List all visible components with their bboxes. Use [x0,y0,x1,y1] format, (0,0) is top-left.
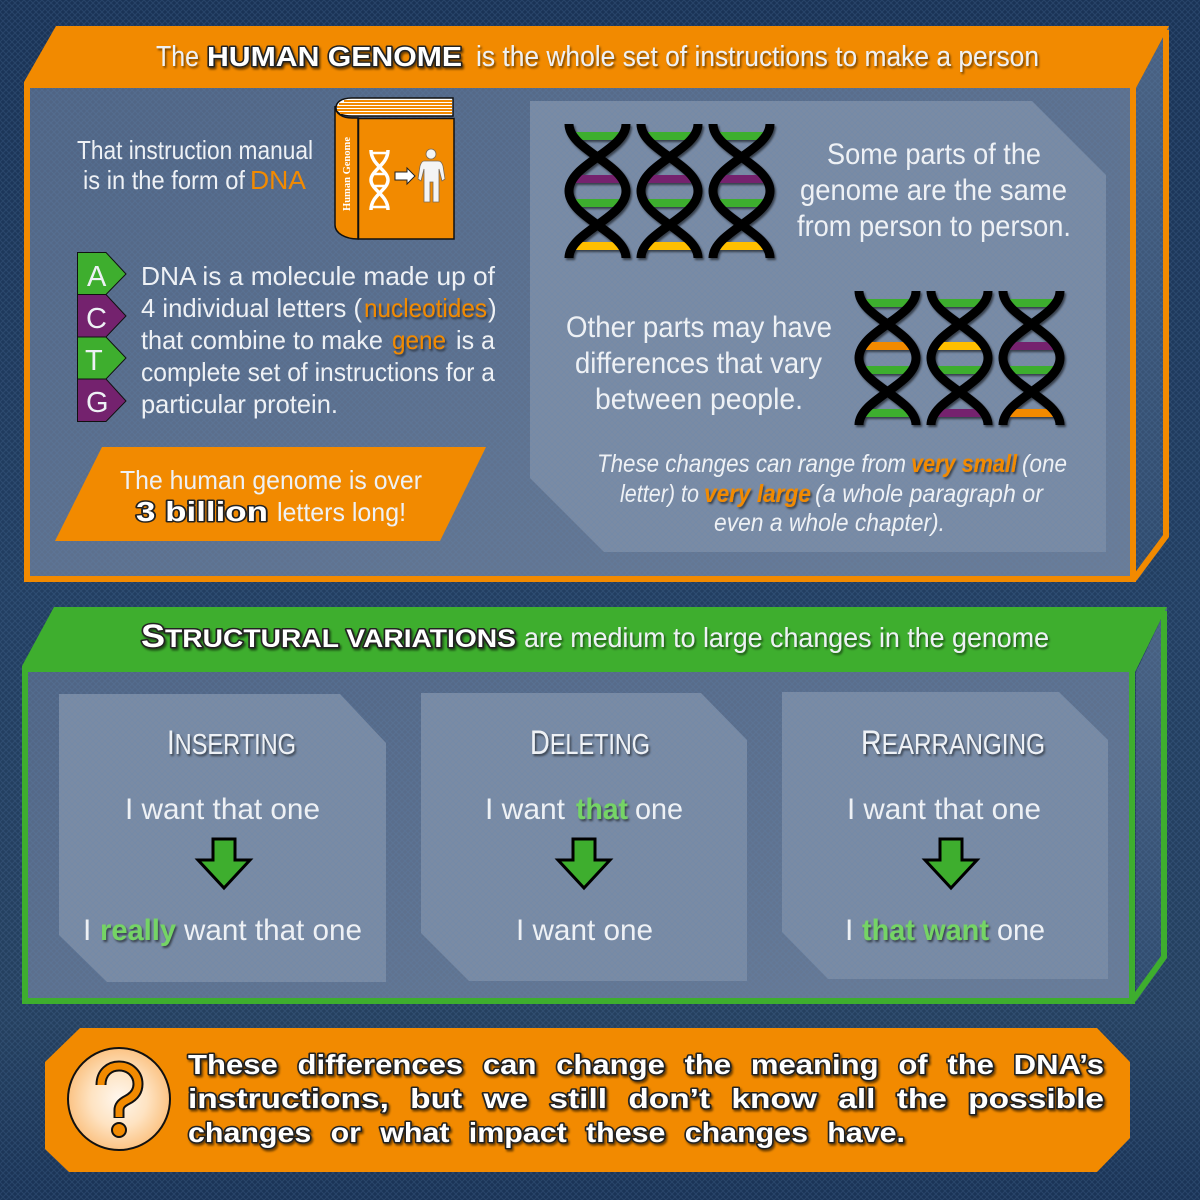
intro text: DNA [250,165,307,195]
DNA paragraph: that combine to make [141,325,383,355]
DNA paragraph [141,261,497,419]
DNA paragraph: ) [488,293,497,323]
panel: human genome [24,26,1169,582]
sentence after: one [997,914,1045,947]
letter tags: ACTG [78,252,126,422]
differences text: differences that vary [575,347,822,380]
arrow [925,839,977,888]
tag C: C [86,303,107,335]
panel: structural variations [22,607,1167,1002]
DNA paragraph: complete set of instructions for a [141,357,495,387]
conclusion text [188,1049,1104,1148]
differences text: Other parts may have [566,311,832,344]
arrow [558,839,610,888]
sentence before: I want [485,793,566,826]
intro text: is in the form of [83,165,246,195]
italic note: (a whole paragraph or [815,480,1045,508]
callout: 3 billion: The human genome is over [120,465,422,495]
sentence after: that want [862,914,989,947]
differences text: between people. [595,383,803,416]
tag G: G [86,387,109,419]
dna 6 [1003,291,1060,425]
panel body [25,669,1132,1001]
dna group: same [569,124,770,258]
book spine [335,106,358,239]
italic note: letter) to [620,480,699,508]
header band [24,26,1169,88]
card: deleting [421,693,747,981]
intro text [77,135,313,195]
DNA paragraph: particular protein. [141,389,338,419]
sentence after: really [100,914,176,947]
dna 3 [713,124,770,258]
tag G [78,379,126,422]
differences text [566,311,832,416]
callout: 3 billion: letters long! [277,497,406,527]
heading: The [156,41,199,73]
sentence before [485,793,683,826]
DNA paragraph: DNA is a molecule made up of [141,261,496,291]
heading [156,41,1039,73]
spine title: Human Genome [342,137,353,211]
conclusion text: These differences can change the meaning of the DNA’s [188,1049,1104,1080]
same text [797,138,1071,243]
sentence after [845,914,1045,947]
panel side outline [1133,611,1164,1000]
italic note: These changes can range from [597,450,906,478]
dna 4 [859,291,916,425]
card title: DELETING [530,724,650,762]
heading: is the whole set of instructions to make a person [476,41,1039,73]
icon: person [418,149,445,202]
intro text: That instruction manual [77,135,313,165]
header band [22,607,1167,672]
arrow [198,839,250,888]
italic note: even a whole chapter). [714,509,945,537]
card title: REARRANGING [861,724,1045,762]
panel side face [1136,607,1167,1002]
conclusion text: changes or what impact these changes have. [188,1117,905,1148]
heading: STRUCTURAL VARIATIONS [141,618,516,654]
italic note: very large [704,480,811,508]
icon: question mark [68,1048,170,1150]
callout: 3 billion [55,447,486,541]
tag T [78,337,126,379]
panel side face [1136,26,1169,582]
heading [141,618,1049,654]
DNA paragraph: gene [392,325,446,355]
panel body [27,85,1133,579]
same text: genome are the same [800,174,1067,207]
dna group: different [859,291,1060,425]
sentence after: want that one [183,914,362,947]
sentence before: I want that one [125,793,320,826]
tag T: T [85,345,103,377]
banner: conclusion [45,1028,1130,1172]
card: inserting [59,694,386,982]
card: genome differences [530,101,1106,552]
icon: small dna [370,150,389,210]
italic note: (one [1022,450,1067,478]
italic note: very small [911,450,1018,478]
dna 5 [931,291,988,425]
icon: book [335,98,454,239]
dna 1 [569,124,626,258]
sentence before: one [635,793,683,826]
sentence before: I want that one [847,793,1041,826]
same text: Some parts of the [827,138,1041,171]
callout: 3 billion: 3 billion [136,496,268,527]
heading: HUMAN GENOME [207,41,462,72]
sentence after: I [83,914,91,947]
tag C [78,294,126,337]
conclusion text: instructions, but we still don’t know all the possible [188,1083,1104,1114]
panel side outline [1134,30,1166,579]
dna 2 [641,124,698,258]
italic note [597,450,1067,537]
card: rearranging [782,692,1108,979]
sentence after: I [845,914,853,947]
DNA paragraph: is a [456,325,496,355]
sentence before: that [576,793,628,826]
icon: small arrow [395,168,415,184]
card title: INSERTING [167,724,296,762]
tag A [78,252,126,294]
sentence after [83,914,362,947]
same text: from person to person. [797,210,1071,243]
sentence after: I want one [516,914,653,947]
tag A: A [87,261,107,293]
book cover [358,118,454,239]
DNA paragraph: nucleotides [364,293,487,323]
DNA paragraph: 4 individual letters ( [141,293,362,323]
book pages [336,98,453,116]
heading: are medium to large changes in the genome [524,622,1049,653]
